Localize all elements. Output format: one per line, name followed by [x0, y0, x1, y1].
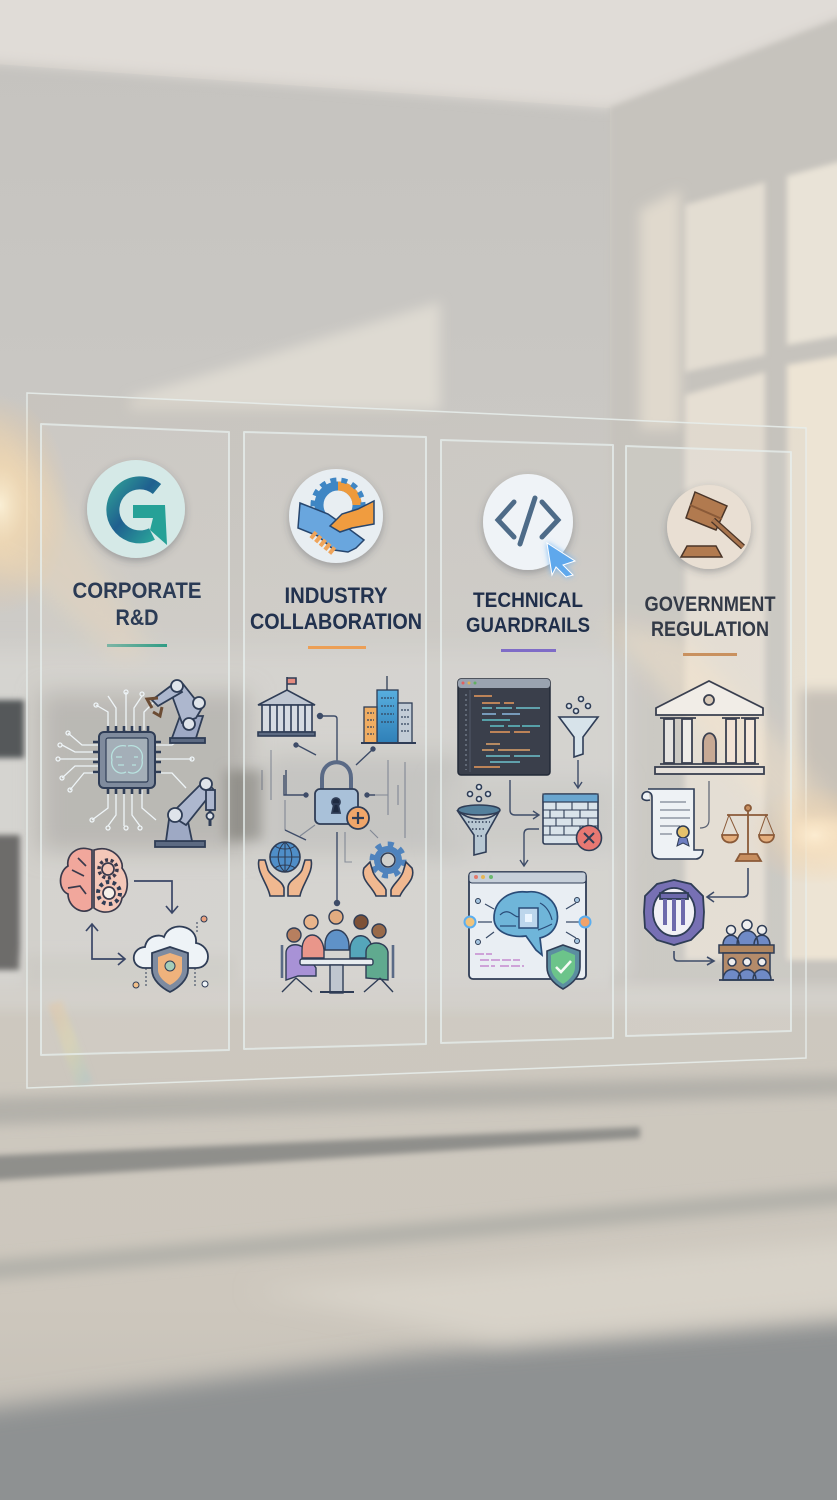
arrow: brain to cloud	[134, 881, 178, 913]
icon: cloud with shield	[133, 916, 208, 992]
heading: industry collaboration	[250, 583, 422, 634]
icon: regulatory seal	[644, 880, 704, 945]
accent line	[107, 644, 167, 647]
connector lines around padlock	[262, 714, 405, 906]
icon: government temple	[655, 681, 764, 774]
arrow: firewall to AI window	[520, 829, 539, 866]
icon: brain with gears	[60, 848, 127, 912]
panel: industry collaboration	[244, 432, 426, 1049]
heading: industry collaboration: INDUSTRY	[284, 583, 388, 608]
heading: corporate R&D	[72, 578, 202, 630]
icon: code brackets with cursor	[483, 474, 575, 577]
accent line	[501, 649, 556, 652]
icon: legislative assembly	[719, 920, 774, 980]
icon: G logo badge	[87, 460, 185, 558]
light flares	[0, 395, 837, 1086]
accent line	[683, 653, 737, 656]
icon: certificate scroll	[642, 789, 703, 859]
heading: corporate R&D: CORPORATE	[72, 578, 202, 603]
icon: browser window with AI brain and shield	[464, 872, 590, 989]
icon: firewall with error mark	[543, 794, 602, 850]
accent line	[308, 646, 366, 649]
glass board	[27, 393, 806, 1088]
icon: funnel with droplets	[559, 696, 598, 757]
heading: corporate R&D: R&D	[116, 605, 158, 630]
icon: handshake and gear badge	[289, 469, 383, 563]
arrow: scale to seal	[707, 868, 748, 902]
arrow: funnel to firewall	[574, 760, 582, 788]
icon: code editor window	[458, 679, 550, 775]
icon: mesh filter funnel	[457, 784, 500, 855]
heading: technical guardrails: TECHNICAL	[473, 589, 583, 612]
icon: city towers	[361, 676, 416, 743]
icon: team around meeting table	[282, 910, 393, 993]
icon: university building	[258, 677, 315, 736]
heading: government regulation: GOVERNMENT	[644, 593, 776, 616]
panel: technical guardrails	[441, 440, 613, 1043]
icon: padlock with plus	[315, 762, 369, 829]
icon: gavel badge	[667, 485, 751, 569]
heading: technical guardrails	[466, 589, 590, 637]
heading: government regulation: REGULATION	[651, 618, 769, 641]
icon: robot arm lower	[155, 778, 215, 847]
arrow: cloud to brain loop	[86, 924, 125, 965]
icon: hands holding globe	[259, 842, 311, 896]
icon: AI chip with circuit traces	[56, 690, 194, 830]
arrow: seal to assembly	[674, 951, 714, 965]
icon: hands holding gear	[363, 844, 413, 896]
connector: temple to scroll	[700, 781, 709, 828]
icon: balance scale	[722, 805, 774, 861]
heading: industry collaboration: COLLABORATION	[250, 609, 422, 634]
heading: technical guardrails: GUARDRAILS	[466, 614, 590, 637]
icon: robot arm upper	[147, 680, 205, 743]
panel: government regulation	[626, 446, 791, 1036]
arrow: code to firewall	[510, 780, 539, 819]
heading: government regulation	[644, 593, 776, 641]
panel: corporate R&D	[41, 424, 229, 1055]
